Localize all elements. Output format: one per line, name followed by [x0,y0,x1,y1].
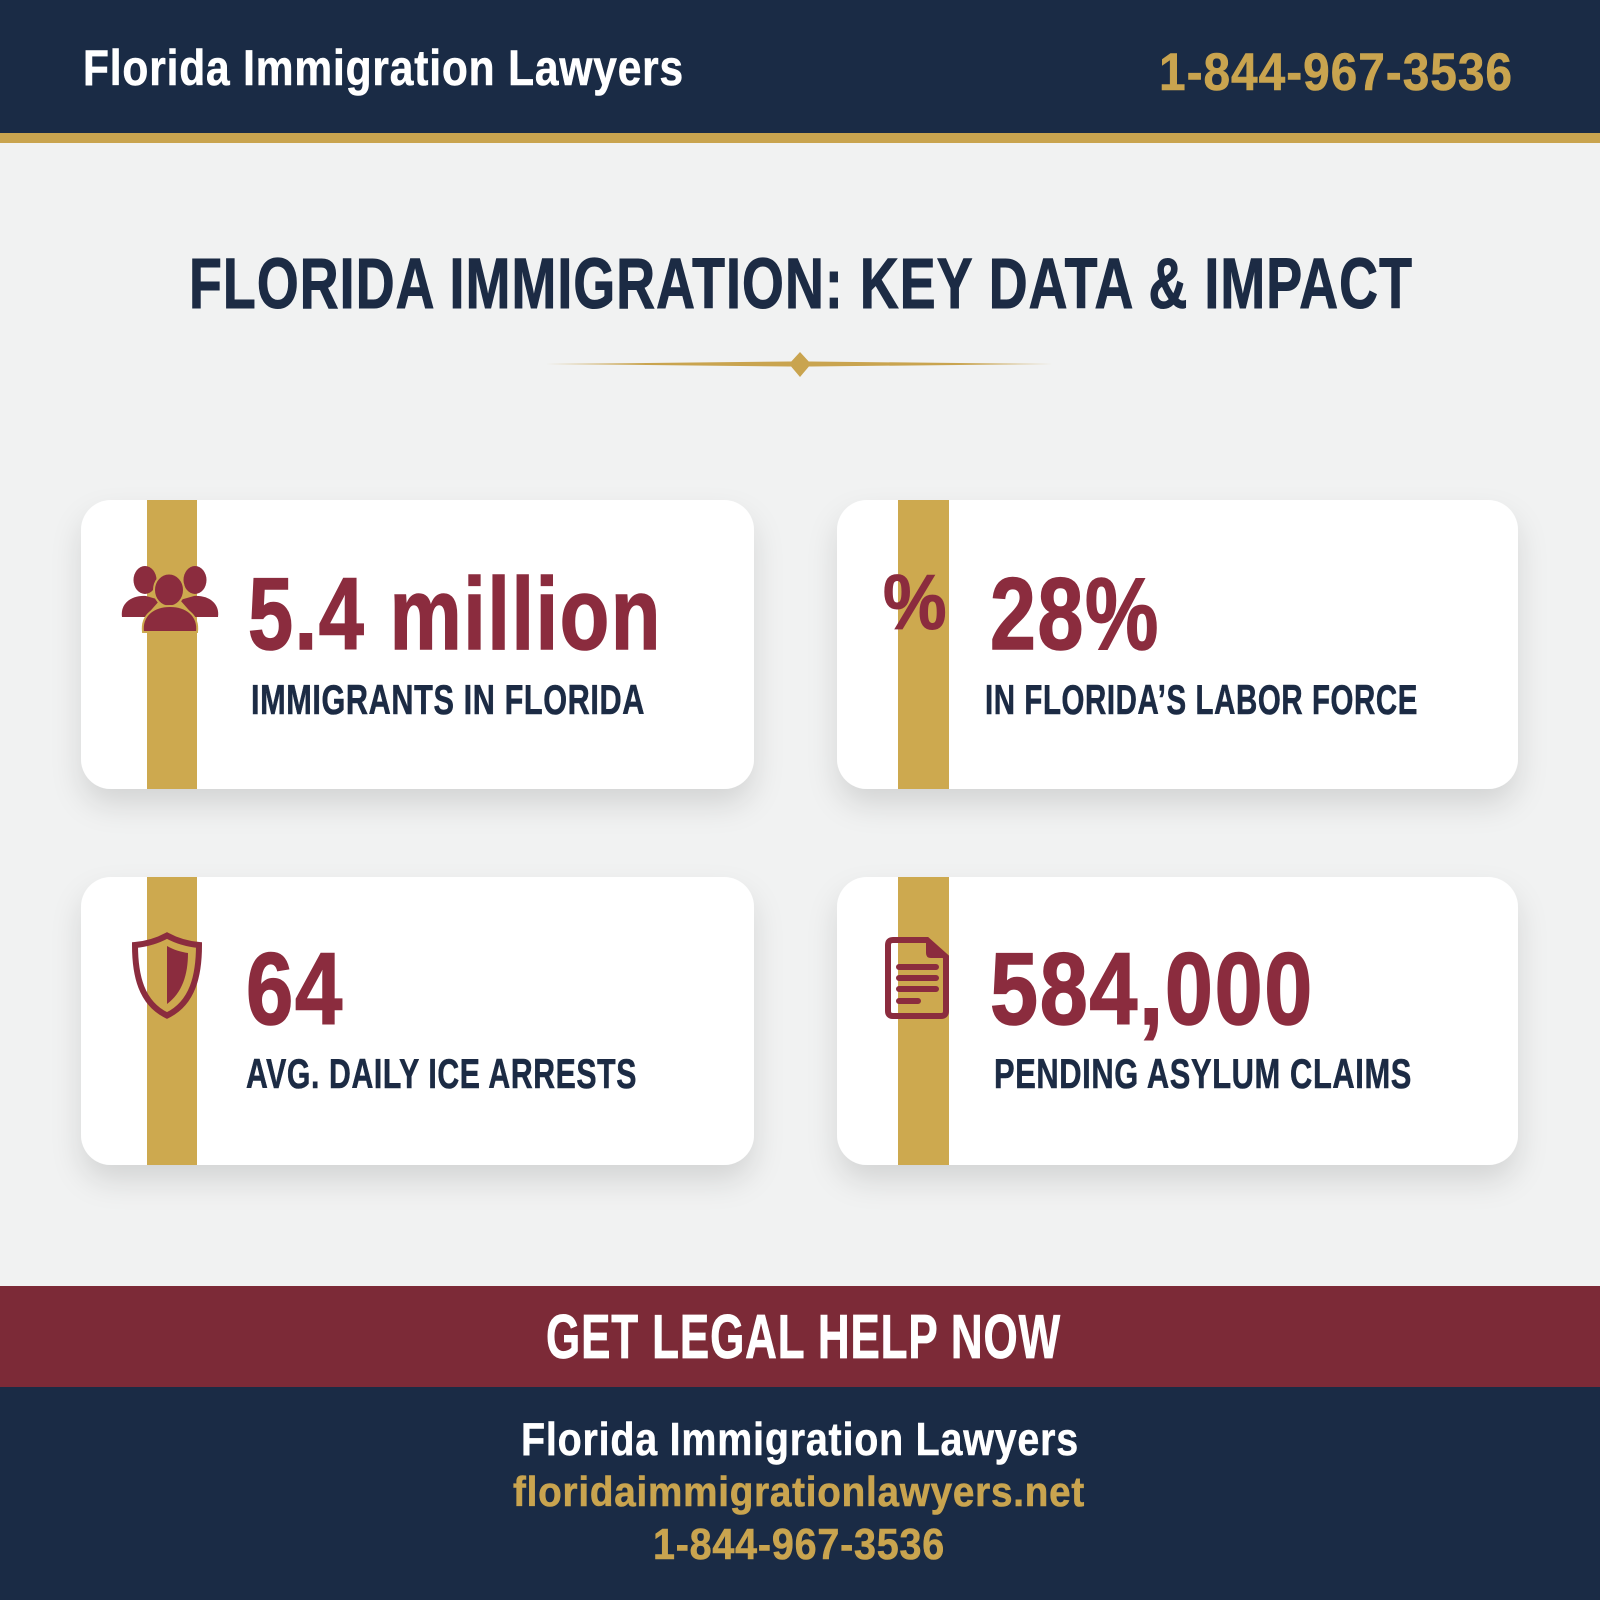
label: labor force: IN FLORIDA’S LABOR FORCE [985,676,1418,723]
header bar [0,0,1600,143]
footer phone: 1-844-967-3536 [653,1520,945,1569]
panel: asylum claims [837,877,1518,1165]
icon: shield [135,936,199,1016]
icon: people [122,566,218,632]
panel: labor force [837,500,1518,789]
stat: 28%: 28% [990,557,1160,671]
label: daily ICE arrests: AVG. DAILY ICE ARRESTS [246,1050,637,1097]
panel: immigrants [81,500,754,789]
panel: ICE arrests [81,877,754,1165]
header phone: 1-844-967-3536 [1159,43,1513,102]
call to action band [0,1286,1600,1387]
stat: 5.4 million: 5.4 million [248,557,662,671]
label: asylum claims: PENDING ASYLUM CLAIMS [994,1050,1412,1097]
title divider [546,352,1053,377]
footer website: floridaimmigrationlawyers.net [513,1468,1085,1515]
footer firm name: Florida Immigration Lawyers [521,1413,1079,1465]
label: immigrants in Florida: IMMIGRANTS IN FLORIDA [251,676,645,723]
icon: percent: % [883,558,948,646]
stat: 584,000: 584,000 [990,932,1314,1046]
call to action text: GET LEGAL HELP NOW [546,1303,1061,1372]
header firm name: Florida Immigration Lawyers [83,40,684,96]
icon: document [888,939,947,1016]
footer [0,1387,1600,1600]
stat: 64: 64 [246,932,344,1046]
